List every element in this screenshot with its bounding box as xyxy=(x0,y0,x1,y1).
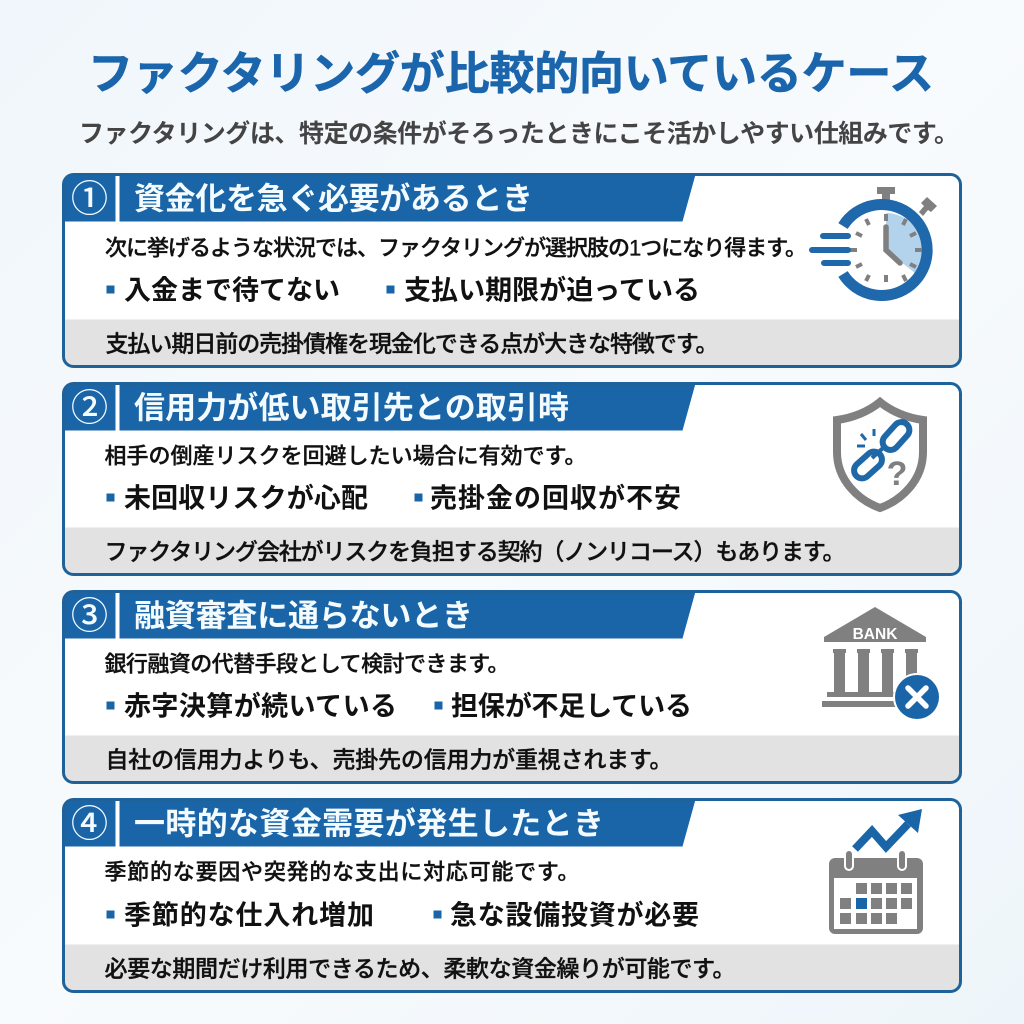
icon: shield with broken chain xyxy=(837,402,923,508)
bullet 2: 売掛金の回収が不安 xyxy=(430,482,681,514)
heading: 一時的な資金需要が発生したとき xyxy=(134,806,604,842)
bullet 2: 支払い期限が迫っている xyxy=(404,274,700,306)
panel: case 4 xyxy=(64,800,960,992)
icon: shield with broken chain: ? xyxy=(887,455,907,493)
panel: case 1 xyxy=(64,174,960,366)
bullet 1: 入金まで待てない xyxy=(124,276,340,306)
note: 支払い期日前の売掛債権を現金化できる点が大きな特徴です。 xyxy=(106,330,718,356)
icon: stopwatch xyxy=(812,187,937,296)
note: ファクタリング会社がリスクを負担する契約（ノンリコース）もあります。 xyxy=(104,538,846,564)
bullet 2: 担保が不足している xyxy=(451,690,692,722)
bullet 1: 赤字決算が続いている xyxy=(124,690,397,722)
icon: bank with cross xyxy=(822,607,941,721)
number: ② xyxy=(71,388,108,428)
icon: calendar with rising arrow xyxy=(829,809,923,934)
panel: case 2 xyxy=(64,384,960,574)
description: 次に挙げるような状況では、ファクタリングが選択肢の1つになり得ます。 xyxy=(105,236,807,260)
number: ③ xyxy=(71,596,108,636)
number: ① xyxy=(71,178,108,220)
heading: 資金化を急ぐ必要があるとき xyxy=(134,182,533,216)
description: 季節的な要因や突発的な支出に対応可能です。 xyxy=(104,860,580,884)
bullet 1: 季節的な仕入れ増加 xyxy=(124,900,374,930)
description: 相手の倒産リスクを回避したい場合に有効です。 xyxy=(104,444,586,468)
heading: 信用力が低い取引先との取引時 xyxy=(134,390,569,426)
heading: 融資審査に通らないとき xyxy=(134,598,473,634)
number: ④ xyxy=(71,804,108,844)
bullet 2: 急な設備投資が必要 xyxy=(450,900,699,930)
subtitle: ファクタリングは、特定の条件がそろったときにこそ活かしやすい仕組みです。 xyxy=(79,119,959,148)
icon: bank with cross: BANK xyxy=(853,626,898,643)
panel: case 3 xyxy=(64,592,960,782)
bullet 1: 未回収リスクが心配 xyxy=(124,482,368,514)
title: ファクタリングが比較的向いているケース xyxy=(88,48,934,99)
note: 自社の信用力よりも、売掛先の信用力が重視されます。 xyxy=(106,746,672,772)
description: 銀行融資の代替手段として検討できます。 xyxy=(104,652,510,676)
note: 必要な期間だけ利用できるため、柔軟な資金繰りが可能です。 xyxy=(104,956,736,982)
